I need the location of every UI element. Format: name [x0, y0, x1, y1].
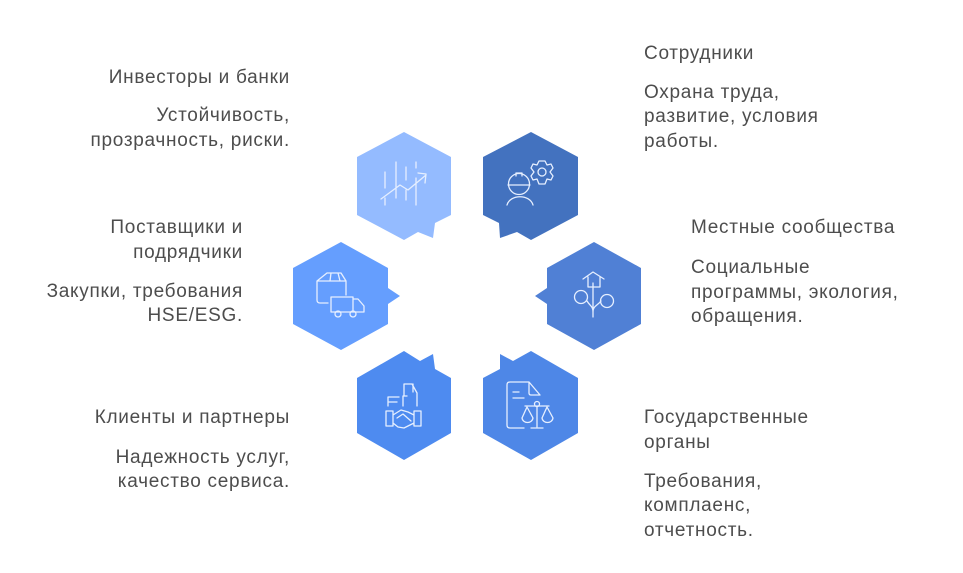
icon: growth chart — [381, 162, 426, 205]
text: clients: Клиенты и партнеры — [95, 407, 290, 428]
hexagon: government — [483, 351, 578, 460]
panel: suppliers and contractors — [47, 217, 400, 350]
text: employees: Охрана труда, — [644, 82, 780, 103]
text: government — [644, 407, 809, 541]
text: employees: Сотрудники — [644, 43, 754, 64]
text: suppliers — [47, 217, 243, 326]
text: employees: развитие, условия — [644, 106, 819, 127]
icon: worker with gear — [507, 161, 553, 205]
text: investors: Инвесторы и банки — [109, 67, 290, 88]
panel: local communities — [535, 217, 899, 350]
icon: box and truck — [317, 273, 364, 317]
text: employees: работы. — [644, 131, 719, 152]
panel: government bodies — [483, 351, 809, 541]
text: clients — [95, 407, 290, 492]
hexagon: investors — [357, 132, 451, 240]
text: suppliers: HSE/ESG. — [147, 305, 243, 326]
panel: investors and banks — [90, 67, 451, 240]
text: communities — [691, 217, 899, 327]
text: government: органы — [644, 432, 711, 453]
text: communities: программы, экология, — [691, 282, 899, 303]
text: government: Требования, — [644, 471, 762, 492]
text: government: Государственные — [644, 407, 809, 428]
hexagon: employees — [483, 132, 578, 240]
icon: buildings and handshake — [386, 384, 421, 428]
text: government: отчетность. — [644, 520, 754, 541]
text: suppliers: Закупки, требования — [47, 281, 243, 302]
text: communities: Социальные — [691, 257, 810, 278]
text: investors: Устойчивость, — [156, 105, 290, 126]
hexagon: clients — [357, 351, 451, 460]
text: communities: Местные сообщества — [691, 217, 895, 238]
hexagon: communities — [535, 242, 641, 350]
text: suppliers: подрядчики — [133, 242, 243, 263]
icon: document and scales — [507, 382, 553, 428]
text: clients: Надежность услуг, — [116, 447, 290, 468]
text: employees — [644, 43, 819, 152]
text: suppliers: Поставщики и — [110, 217, 243, 238]
hexagon: suppliers — [293, 242, 400, 350]
text: clients: качество сервиса. — [118, 471, 290, 492]
panel: employees — [483, 43, 819, 240]
text: government: комплаенс, — [644, 495, 751, 516]
text: investors: прозрачность, риски. — [90, 130, 290, 151]
panel: clients and partners — [95, 351, 451, 492]
text: investors — [90, 67, 290, 151]
icon: house and tree — [574, 272, 614, 317]
text: communities: обращения. — [691, 306, 803, 327]
